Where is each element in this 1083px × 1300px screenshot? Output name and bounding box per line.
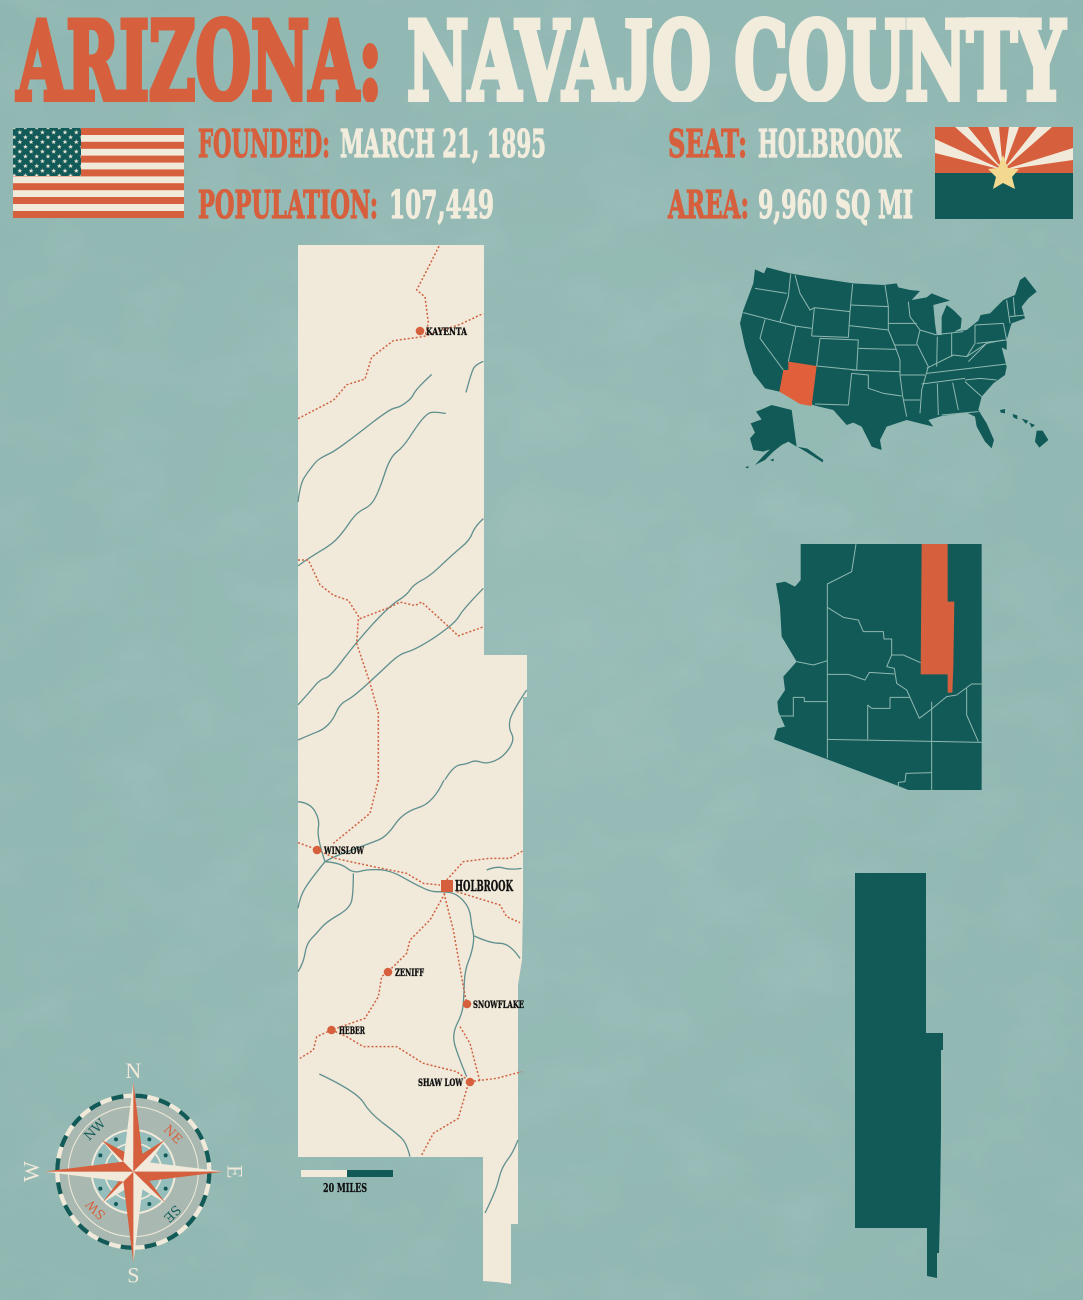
map: county silhouette bbox=[855, 873, 943, 1278]
county borders bbox=[777, 544, 982, 790]
compass star diagonals bbox=[102, 1139, 166, 1203]
rivers south bbox=[298, 780, 522, 1213]
cardinal labels bbox=[18, 1058, 247, 1288]
intercardinal labels: SE bbox=[161, 1202, 184, 1225]
city: Heber: HEBER bbox=[339, 1026, 365, 1037]
city: Winslow: WINSLOW bbox=[323, 846, 365, 857]
city: Zeniff bbox=[384, 968, 424, 979]
icon: US flag bbox=[13, 128, 184, 218]
intercardinal labels bbox=[81, 1116, 186, 1225]
title: ARIZONA: bbox=[16, 0, 382, 125]
intercardinal labels: NW bbox=[81, 1116, 108, 1143]
compass rose bbox=[18, 1058, 247, 1288]
rivers north bbox=[298, 361, 527, 780]
city: Shaw Low: SHAW LOW bbox=[418, 1078, 464, 1089]
intercardinal labels: SW bbox=[83, 1197, 108, 1223]
cardinal labels: E bbox=[222, 1165, 247, 1178]
text: population: 107,449 bbox=[389, 182, 494, 227]
intercardinal labels: NE bbox=[161, 1122, 186, 1147]
state borders bbox=[743, 274, 1025, 417]
Alaska bbox=[745, 405, 823, 468]
compass star cardinals bbox=[44, 1082, 224, 1263]
text: founded: FOUNDED: bbox=[198, 121, 330, 166]
cardinal labels: N bbox=[125, 1058, 141, 1083]
text: founded: MARCH 21, 1895 bbox=[340, 121, 546, 166]
city: Snowflake: SNOWFLAKE bbox=[473, 1000, 524, 1011]
city: Holbrook bbox=[441, 877, 514, 895]
text: seat: SEAT: bbox=[668, 121, 747, 166]
map: county main bbox=[298, 245, 527, 1284]
cardinal labels: S bbox=[127, 1263, 139, 1288]
city: Zeniff: ZENIFF bbox=[395, 968, 424, 979]
scale bar bbox=[301, 1170, 393, 1195]
Arizona highlight bbox=[779, 362, 817, 406]
Navajo County highlight bbox=[921, 544, 954, 693]
cardinal labels: W bbox=[18, 1161, 43, 1182]
Hawaii bbox=[1000, 409, 1048, 448]
city: Snowflake bbox=[463, 1000, 524, 1011]
text: area: AREA: bbox=[667, 182, 749, 227]
city: Winslow bbox=[313, 846, 365, 857]
text: founded bbox=[198, 121, 546, 166]
city: Kayenta bbox=[416, 327, 467, 338]
roads south bbox=[298, 780, 523, 1155]
roads north bbox=[298, 246, 483, 781]
map: United States bbox=[740, 267, 1048, 468]
title bbox=[14, 16, 1068, 102]
map: Arizona counties bbox=[774, 544, 982, 790]
text: area bbox=[667, 182, 913, 227]
city: Heber bbox=[327, 1026, 365, 1037]
text: seat: HOLBROOK bbox=[758, 121, 902, 166]
text: seat bbox=[668, 121, 902, 166]
city: Holbrook: HOLBROOK bbox=[455, 877, 514, 895]
compass ticks bbox=[98, 1137, 168, 1206]
text: population: POPULATION: bbox=[198, 182, 378, 227]
icon: Arizona flag bbox=[935, 127, 1073, 219]
city: Kayenta: KAYENTA bbox=[426, 327, 467, 338]
scale bar: 20 MILES bbox=[323, 1181, 367, 1195]
text: area: 9,960 SQ MI bbox=[758, 182, 913, 227]
